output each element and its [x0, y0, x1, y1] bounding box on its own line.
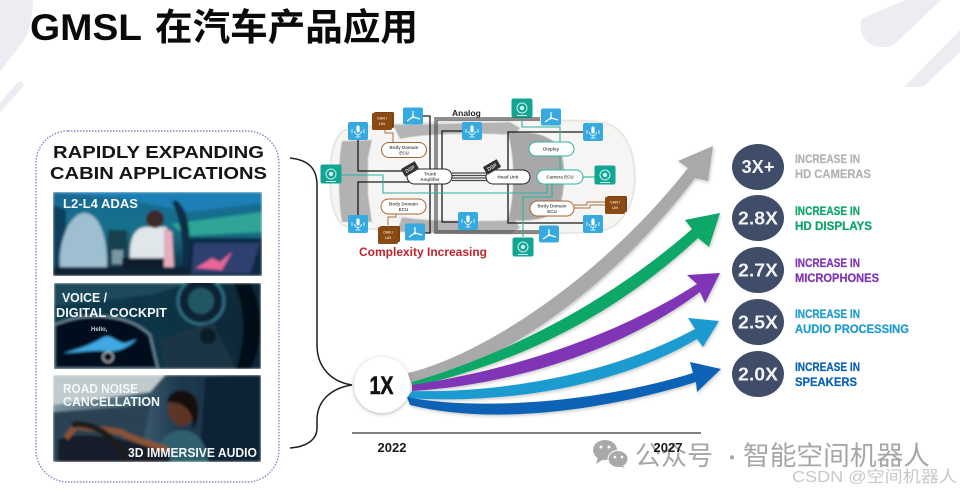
watermark: CSDN: CSDN @空间机器人 [792, 468, 957, 486]
watermark: account name: · [722, 442, 742, 471]
panel heading [50, 142, 267, 183]
watermark: account name: 公众号 [635, 434, 713, 473]
year 2027: 2027 [654, 440, 682, 455]
background decoration: top-right corner shapes [861, 0, 960, 87]
ECU: body domain top left: ECU [399, 150, 409, 156]
wiring: brown [385, 128, 607, 225]
panel heading: RAPIDLY EXPANDING [53, 142, 264, 162]
panel heading: CABIN APPLICATIONS [50, 163, 267, 183]
icon: camera [512, 238, 534, 256]
icon: sensor axis [541, 108, 561, 126]
arrow: HD cameras (grey) [408, 146, 713, 385]
ECU: body domain top left [382, 142, 426, 158]
year 2022: 2022 [378, 440, 406, 455]
ECU: body domain right: Body Domain [537, 204, 567, 208]
panel: cabin applications [36, 131, 279, 482]
stat: HD cameras: HD CAMERAS [795, 167, 871, 181]
icon: camera [594, 166, 616, 184]
stat: microphones: 2.7X [738, 260, 778, 280]
icon: camera [320, 164, 342, 184]
stat: speakers: 2.0X [738, 364, 778, 384]
stat: audio processing: AUDIO PROCESSING [795, 322, 909, 336]
watermark: account name [635, 434, 930, 473]
stat: audio processing: INCREASE IN [795, 307, 860, 321]
ECU: display [529, 142, 574, 156]
icon: microphone [348, 215, 368, 233]
CAN/LIN block [372, 112, 394, 130]
photo labels: CANCELLATION [63, 395, 160, 409]
stat: speakers: INCREASE IN [795, 360, 860, 374]
stat: audio processing [732, 299, 909, 345]
start circle 1X: 1X [370, 372, 394, 400]
photo: voice / digital cockpit [54, 278, 261, 369]
photo: L2-L4 ADAS [53, 192, 262, 276]
stat: microphones [732, 247, 879, 293]
stat: HD displays: HD DISPLAYS [795, 219, 872, 233]
photo labels: ROAD NOISE [63, 382, 138, 396]
stat: HD cameras [732, 144, 871, 190]
wiring: analog grey [435, 118, 540, 233]
wiring: teal [342, 118, 595, 237]
icon: microphone [458, 212, 478, 230]
stat: microphones: MICROPHONES [795, 271, 879, 285]
watermark: account name: 智能空间机器人 [743, 434, 930, 473]
car body [330, 120, 635, 234]
photo label [56, 291, 167, 320]
arrow: speakers (dark blue) [407, 362, 721, 415]
ECU: head unit: Head Unit [497, 174, 519, 180]
ECU: head unit [486, 170, 530, 184]
stat: speakers [732, 351, 860, 397]
panel outline [36, 131, 279, 482]
stat: HD displays: 2.8X [738, 208, 778, 228]
ECU: trunk amplifier: Trunk [424, 172, 437, 176]
icon: camera [512, 98, 532, 118]
photo label: L2-L4 ADAS [63, 197, 138, 211]
ECU: body domain right: ECU [547, 209, 557, 214]
icon: sensor axis [405, 224, 425, 240]
ECU: trunk amplifier [407, 169, 452, 184]
photo labels: 3D IMMERSIVE AUDIO [128, 446, 257, 460]
icon: microphone [583, 123, 603, 141]
stat: HD cameras: INCREASE IN [795, 152, 860, 166]
chip: DSP trunk: DSP [404, 164, 417, 175]
ECU: camera [537, 170, 583, 184]
stat: microphones: INCREASE IN [795, 256, 860, 270]
ECU: body domain bottom left: Body Domain [389, 202, 418, 206]
stat: HD cameras: 3X+ [742, 157, 774, 177]
icon: sensor axis [539, 226, 559, 242]
CAN/LIN block [378, 226, 400, 244]
icon: sensor axis [403, 108, 423, 124]
icon: microphone [462, 122, 482, 140]
complexity label: Complexity Increasing [359, 245, 487, 259]
stat: speakers: SPEAKERS [795, 375, 857, 389]
ECU: body domain bottom left [381, 199, 426, 214]
chip: DSP head unit: DSP [486, 162, 499, 173]
chip: DSP head unit [483, 159, 501, 175]
ECU: body domain top left: Body Domain [389, 145, 419, 150]
photo label: VOICE / [62, 291, 108, 305]
ECU: trunk amplifier: Amplifier [420, 177, 440, 182]
watermark: WeChat icon [593, 440, 628, 468]
icon: microphone [583, 215, 603, 233]
stat: HD displays: INCREASE IN [795, 204, 860, 218]
ECU: body domain right [530, 201, 574, 216]
arrow: HD displays (green) [412, 213, 720, 387]
car architecture diagram [320, 98, 635, 259]
stat: audio processing: 2.5X [738, 312, 778, 332]
arrow: audio processing (light blue) [407, 318, 719, 399]
title [30, 0, 418, 51]
ECU: display: Display [543, 146, 559, 152]
CAN/LIN block [605, 196, 627, 214]
stat: HD displays [732, 195, 872, 241]
photo: road noise cancellation [53, 375, 261, 462]
arrow: microphones (purple) [412, 273, 720, 391]
wiring: black [358, 116, 583, 233]
start circle 1X [354, 357, 410, 413]
ECU: camera: Camera ECU [546, 174, 574, 180]
small screen text: Hello, [91, 327, 108, 333]
title: GMSL [30, 7, 142, 48]
photo labels [63, 382, 257, 460]
growth arrows [407, 146, 721, 415]
bracket connector from panel to 1X [290, 158, 352, 448]
ECU: body domain bottom left: ECU [399, 207, 408, 212]
icon: microphone [348, 122, 368, 140]
background decoration: top-left corner shapes [0, 0, 33, 108]
chip: DSP trunk [401, 161, 419, 177]
photo label: DIGITAL COCKPIT [56, 306, 167, 320]
label: analog: Analog [452, 108, 481, 118]
